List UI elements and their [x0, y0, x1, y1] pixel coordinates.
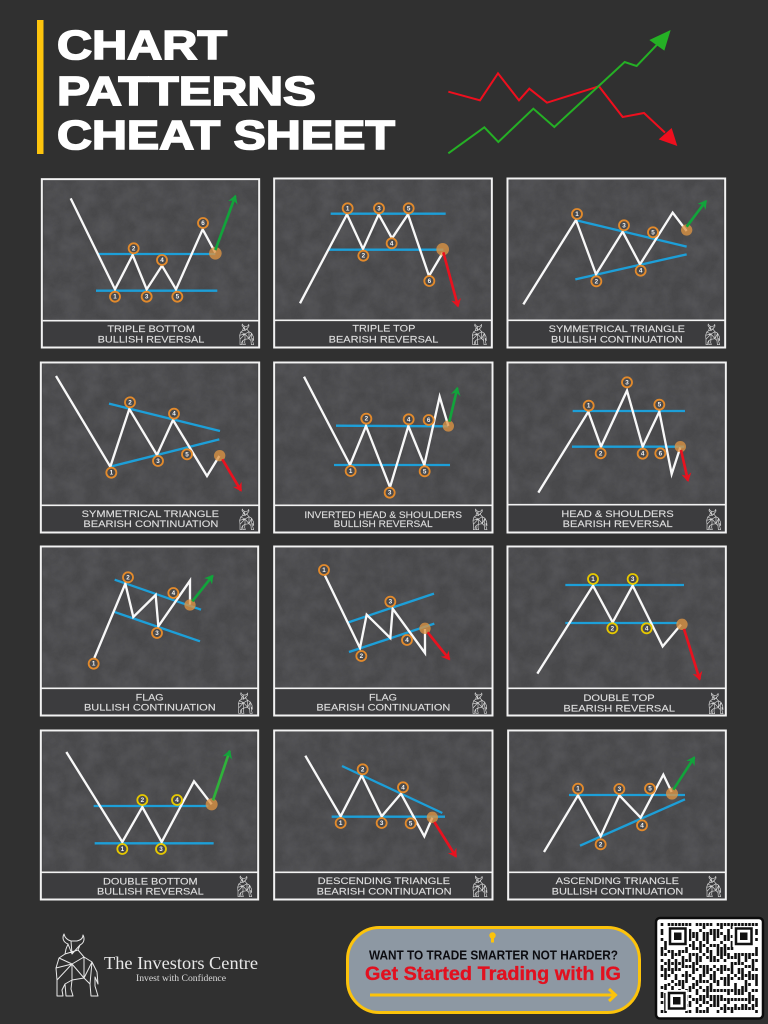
point markers: 3 — [388, 490, 392, 497]
point markers: 6 — [428, 278, 432, 285]
arrow down — [684, 629, 700, 679]
arrow down — [434, 822, 456, 857]
point markers: 5 — [648, 786, 652, 793]
caption — [317, 876, 452, 897]
icon: bull — [240, 324, 254, 345]
icon: bull — [707, 876, 721, 897]
panel: triple bottom — [42, 179, 259, 347]
point markers — [346, 414, 434, 498]
brand name: The Investors Centre — [104, 953, 258, 973]
point markers — [588, 574, 652, 633]
red line — [448, 73, 665, 133]
point markers: 4 — [160, 257, 164, 264]
caption: BULLISH REVERSAL — [334, 519, 433, 529]
point markers: 1 — [121, 846, 125, 853]
point markers: 1 — [322, 567, 326, 574]
caption — [97, 876, 204, 897]
arrow up — [449, 388, 457, 422]
heading — [57, 22, 395, 158]
caption — [316, 692, 450, 713]
tagline: Invest with Confidence — [136, 973, 226, 984]
icon: bull — [473, 693, 487, 713]
point markers: 5 — [423, 468, 427, 475]
point markers — [110, 218, 208, 302]
point markers: 5 — [176, 294, 180, 301]
icon: bull — [707, 509, 721, 530]
point markers: 5 — [185, 451, 189, 458]
red arrowhead — [659, 128, 677, 146]
caption: TRIPLE TOP — [352, 324, 415, 334]
panel: descending triangle — [274, 730, 492, 899]
caption — [98, 324, 204, 344]
point markers: 4 — [645, 625, 649, 632]
arrow down — [681, 450, 688, 481]
point markers: 3 — [156, 458, 160, 465]
point markers: 5 — [409, 820, 413, 827]
QR finder top right — [732, 926, 754, 947]
panel: ascending triangle — [508, 730, 726, 899]
point markers: 2 — [362, 253, 366, 260]
icon: bull — [709, 693, 723, 714]
caption — [329, 324, 438, 344]
arrow down — [428, 632, 449, 659]
icon: bull — [473, 876, 487, 897]
call to action button — [348, 928, 640, 1012]
heading: PATTERNS — [57, 68, 316, 114]
icon: bull — [238, 876, 252, 897]
point markers: 4 — [390, 240, 394, 247]
pattern line — [56, 376, 219, 476]
logo: The Investors Centre — [56, 934, 258, 996]
arrow up — [192, 576, 213, 601]
pattern line — [537, 586, 681, 674]
panel: symmetrical triangle bullish — [507, 178, 725, 347]
point markers: 2 — [365, 416, 369, 423]
point markers: 1 — [576, 786, 580, 793]
caption: ASCENDING TRIANGLE — [556, 876, 679, 886]
point markers: 2 — [611, 625, 615, 632]
pattern line — [325, 576, 425, 653]
point markers: 3 — [631, 576, 635, 583]
caption — [563, 693, 675, 713]
point markers: 4 — [401, 784, 405, 791]
QR code — [656, 918, 763, 1018]
point markers: 5 — [407, 205, 411, 212]
point markers: 3 — [625, 379, 629, 386]
QR finder top left — [667, 926, 689, 947]
caption: BULLISH REVERSAL — [98, 334, 204, 344]
point markers: 4 — [175, 797, 179, 804]
caption — [304, 510, 462, 529]
point markers — [343, 203, 434, 286]
arrow up — [687, 201, 706, 227]
pattern line — [544, 775, 672, 852]
point markers: 1 — [113, 294, 117, 301]
point markers: 1 — [346, 205, 350, 212]
green arrowhead — [649, 30, 671, 51]
caption — [84, 692, 216, 713]
caption: FLAG — [369, 692, 397, 702]
caption — [552, 876, 683, 896]
green line — [448, 43, 658, 153]
point markers — [319, 565, 412, 661]
icon: bull logo — [56, 934, 98, 996]
caption: BULLISH CONTINUATION — [551, 334, 683, 344]
QR finder bottom left — [666, 990, 688, 1011]
icon: bull — [706, 324, 720, 345]
arrow down — [443, 252, 458, 306]
icon: light bulb — [489, 932, 496, 942]
point markers — [572, 209, 658, 286]
caption: DOUBLE BOTTOM — [103, 876, 198, 886]
caption: BEARISH CONTINUATION — [83, 519, 218, 529]
point markers — [117, 795, 182, 854]
point markers: 4 — [639, 268, 643, 275]
caption: SYMMETRICAL TRIANGLE — [82, 509, 219, 519]
panel: inverted head and shoulders — [274, 362, 492, 532]
point markers: 1 — [349, 468, 353, 475]
point markers: 3 — [159, 846, 163, 853]
point markers: 3 — [145, 294, 149, 301]
arrow up — [215, 196, 235, 250]
point markers: 2 — [128, 399, 132, 406]
arrow up — [673, 757, 694, 790]
pattern line — [523, 213, 687, 304]
point markers: 4 — [641, 451, 645, 458]
point markers: 2 — [360, 653, 364, 660]
point markers — [336, 764, 416, 828]
point markers: 5 — [651, 229, 655, 236]
point markers — [89, 572, 178, 669]
caption — [561, 509, 674, 529]
point markers: 2 — [595, 278, 599, 285]
icon: bull — [240, 509, 254, 530]
panel: symmetrical triangle bearish — [41, 362, 259, 532]
caption: BEARISH CONTINUATION — [316, 703, 450, 713]
caption: DESCENDING TRIANGLE — [318, 876, 450, 886]
icon: bull — [473, 509, 487, 530]
caption: BULLISH CONTINUATION — [84, 703, 216, 713]
caption: DOUBLE TOP — [583, 693, 655, 703]
cta text: Get Started Trading with IG — [365, 963, 621, 985]
point markers: 3 — [618, 786, 622, 793]
caption: BEARISH REVERSAL — [563, 519, 673, 529]
point markers: 2 — [599, 450, 603, 457]
arrow right — [370, 989, 616, 1001]
caption — [549, 324, 685, 344]
point markers: 4 — [640, 822, 644, 829]
pattern line — [71, 198, 215, 289]
panel: triple top — [274, 178, 492, 347]
point markers: 2 — [599, 841, 603, 848]
accent bar — [37, 20, 44, 154]
point markers: 3 — [622, 222, 626, 229]
heading: CHART — [57, 22, 227, 68]
point markers: 5 — [658, 402, 662, 409]
caption: BEARISH REVERSAL — [329, 334, 438, 344]
point markers: 6 — [201, 220, 205, 227]
point markers: 2 — [141, 797, 145, 804]
pattern line — [538, 391, 680, 493]
point markers: 1 — [587, 403, 591, 410]
caption — [82, 509, 219, 529]
caption: BEARISH CONTINUATION — [317, 887, 452, 897]
panel: double bottom — [41, 730, 258, 899]
caption: FLAG — [136, 692, 164, 702]
caption: BEARISH REVERSAL — [563, 703, 675, 713]
QR modules — [662, 923, 756, 1013]
icon: bull — [472, 324, 486, 345]
point markers — [573, 784, 655, 849]
point markers: 1 — [575, 211, 579, 218]
point markers: 2 — [132, 245, 136, 252]
header line chart icon — [448, 30, 677, 153]
icon: bull — [238, 693, 252, 713]
panel: head and shoulders — [507, 362, 726, 532]
heading: CHEAT SHEET — [57, 112, 395, 158]
arrow down — [222, 459, 241, 491]
pattern line — [66, 752, 212, 842]
title block — [37, 20, 395, 158]
point markers: 4 — [405, 637, 409, 644]
caption: BULLISH REVERSAL — [97, 887, 204, 897]
pattern line — [304, 377, 448, 487]
point markers: 1 — [339, 820, 343, 827]
caption: TRIPLE BOTTOM — [107, 324, 195, 334]
point markers — [584, 377, 665, 459]
point markers: 4 — [172, 590, 176, 597]
caption: SYMMETRICAL TRIANGLE — [549, 324, 685, 334]
panel: double top — [507, 546, 726, 715]
panel: flag bearish — [274, 546, 492, 715]
point markers: 4 — [172, 411, 176, 418]
pattern line — [300, 214, 443, 303]
point markers: 1 — [92, 661, 96, 668]
caption: HEAD & SHOULDERS — [561, 509, 674, 519]
pattern line — [94, 581, 190, 658]
point markers: 6 — [659, 450, 663, 457]
point markers: 2 — [361, 766, 365, 773]
point markers: 3 — [377, 205, 381, 212]
point markers: 2 — [126, 574, 130, 581]
point markers: 3 — [155, 630, 159, 637]
prompt text: WANT TO TRADE SMARTER NOT HARDER? — [369, 948, 618, 962]
pattern line — [305, 756, 432, 836]
point markers — [106, 397, 192, 478]
panel: flag bullish — [41, 546, 258, 715]
arrow up — [213, 751, 230, 800]
point markers: 1 — [110, 470, 114, 477]
point markers: 3 — [380, 820, 384, 827]
point markers: 4 — [407, 416, 411, 423]
point markers: 6 — [427, 417, 431, 424]
point markers: 1 — [591, 576, 595, 583]
caption: INVERTED HEAD & SHOULDERS — [304, 510, 462, 520]
caption: BULLISH CONTINUATION — [552, 886, 683, 896]
point markers: 3 — [389, 599, 393, 606]
